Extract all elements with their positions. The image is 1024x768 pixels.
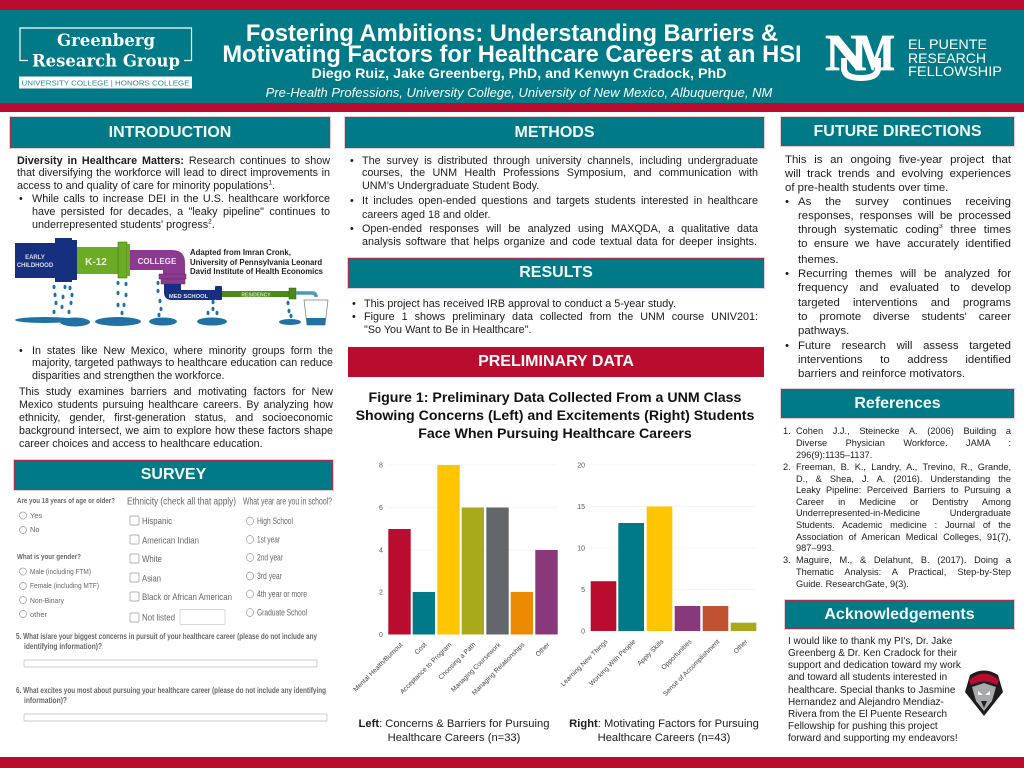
text: future directions: themes. — [798, 254, 839, 266]
survey form screenshot: Ethnicity (check all that apply) — [127, 496, 236, 508]
text: acknowledgements: Hernandez and Alejandro Mendiaz- — [788, 697, 944, 708]
text: methods: It includes open-ended questions and targets students interested in healthcare — [362, 195, 758, 207]
text: introduction top: underrepresented students' progress2. — [32, 218, 215, 231]
logo: Greenberg Research Group: Research Group — [32, 52, 180, 72]
authors: Diego Ruiz, Jake Greenberg, PhD, and Kenwyn Cradock, PhD — [312, 66, 726, 82]
text: future directions: responses, responses will be processed — [798, 210, 1011, 222]
bar chart: motivating factors: 15 — [577, 504, 585, 511]
text: future directions: interventions to address identified — [798, 354, 1011, 366]
text: methods: • — [350, 155, 354, 167]
heading: introduction: INTRODUCTION — [109, 124, 231, 141]
bar chart: concerns and barriers: Mental Health/Burnout — [352, 641, 405, 693]
caption: right chart: Right: Motivating Factors for Pursuing — [569, 718, 759, 730]
text: future directions: This is an ongoing five-year project that — [785, 154, 1011, 166]
residency pipe — [222, 291, 290, 297]
survey form screenshot: 6. What excites you most about pursuing your healthcare career (please do not include any identifying — [16, 686, 326, 695]
survey form screenshot: Not listed — [142, 612, 175, 624]
survey form screenshot: High School — [257, 516, 293, 526]
text: future directions: • — [785, 268, 789, 280]
college pipe — [130, 250, 185, 275]
survey form screenshot: Hispanic — [142, 516, 172, 527]
text: introduction bottom: This study examines barriers and motivating factors for New — [19, 386, 333, 398]
text: future directions: pathways. — [798, 325, 849, 337]
survey form screenshot: 4th year or more — [257, 589, 307, 599]
text: introduction bottom: • — [19, 345, 23, 357]
survey form screenshot: 5. What is/are your biggest concerns in pursuit of your healthcare career (please do not include any — [16, 632, 317, 641]
heading: future directions: FUTURE DIRECTIONS — [814, 123, 982, 140]
bar chart: motivating factors — [560, 462, 757, 698]
logo: UNM El Puente Research Fellowship: M — [855, 25, 895, 82]
text: references: Underrepresented-in-Medicine Undergraduate — [796, 508, 1011, 518]
text: acknowledgements: forward and supporting my endeavors! — [788, 733, 958, 744]
leaky pipeline diagram: K-12 — [85, 257, 107, 268]
red band below header — [0, 103, 1024, 112]
text: references: 296(9):1135–1137. — [796, 450, 872, 460]
logo: UNM El Puente Research Fellowship — [825, 25, 1002, 82]
figure title: Face When Pursuing Healthcare Careers — [418, 426, 692, 442]
text: references — [783, 426, 1011, 589]
bar chart: motivating factors: Apply Skills — [636, 638, 666, 668]
text: results: • — [352, 298, 356, 310]
heading: preliminary data — [348, 347, 764, 377]
survey form screenshot: Are you 18 years of age or older? — [17, 496, 115, 505]
text: references: Guide. ResearchGate, 9(3). — [796, 579, 909, 589]
bar chart: concerns and barriers: Managing Coursework — [450, 641, 503, 694]
heading: acknowledgements — [785, 600, 1014, 629]
text: methods: careers aged 18 and older. — [362, 209, 490, 221]
survey form screenshot: Black or African American — [142, 592, 232, 603]
text: pipeline credit: David Institute of Health Economics — [190, 267, 323, 276]
text: results: This project has received IRB approval to conduct a 5-year study. — [364, 298, 676, 310]
heading: introduction — [10, 117, 330, 148]
heading: results: RESULTS — [519, 264, 593, 281]
text: introduction bottom: majority, targeted pathways to healthcare education can reduce — [32, 357, 333, 369]
leaky pipeline diagram: CHILDHOOD — [17, 263, 54, 269]
text: acknowledgements: I would like to thank my PI's, Dr. Jake — [788, 636, 952, 647]
text: introduction top: that diversifying the workforce will lead to direct improvements in — [17, 167, 330, 179]
text: references: Students. Academic medicine : Journal of the — [796, 520, 1011, 530]
figure title — [356, 390, 754, 442]
survey form screenshot: Yes — [30, 511, 42, 520]
faucet pipe — [296, 293, 316, 297]
text: references: 1. — [783, 426, 791, 436]
survey form screenshot: Asian — [142, 574, 161, 584]
survey form screenshot: What is your gender? — [17, 552, 81, 561]
text: acknowledgements: and toward all students interested in — [788, 672, 947, 683]
survey form screenshot: American Indian — [142, 536, 199, 546]
leaky pipeline diagram — [15, 238, 328, 326]
survey form screenshot: Male (including FTM) — [30, 567, 91, 576]
text: acknowledgements: healthcare. Special thanks to Jasmine — [788, 685, 955, 696]
heading: methods — [345, 117, 764, 148]
text: references: Leaky Pipeline: Perceived Barriers to Pursuing a — [796, 485, 1011, 495]
bar chart: motivating factors: 0 — [581, 628, 585, 636]
text: references: D., & Shea, J. A. (2016). Understanding the — [796, 474, 1011, 484]
text: references: 3. — [783, 555, 791, 565]
text: references: Career in Medicine or Dentistry Among — [796, 497, 1011, 507]
text: pipeline credit: Adapted from Imran Cronk, — [190, 248, 291, 257]
survey form screenshot: identifying information)? — [24, 642, 102, 651]
text: future directions: to ensure we have accurately identified — [798, 238, 1011, 250]
heading: acknowledgements: Acknowledgements — [824, 606, 975, 623]
bar chart: concerns and barriers: 8 — [379, 462, 383, 470]
text: results: "So You Want to Be in Healthcare". — [364, 324, 532, 336]
survey form screenshot: Female (including MTF) — [30, 581, 99, 590]
figure title: Figure 1: Preliminary Data Collected From a UNM Class — [369, 390, 741, 406]
text: references: Cohen J.J., Steinecke A. (2006) Building a — [796, 426, 1011, 436]
text: methods: analysis software that helps organize and code textual data for deeper insights. — [362, 236, 757, 248]
bar chart: concerns and barriers: Acceptance to Program — [399, 641, 454, 696]
bar chart: motivating factors: 5 — [581, 587, 585, 594]
text: future directions: Future research will assess targeted — [798, 340, 1011, 352]
text: future directions: barriers and reinforce motivators. — [798, 368, 965, 380]
text: results — [352, 298, 758, 336]
leaky pipeline diagram: RESIDENCY — [241, 292, 271, 298]
leaky pipeline diagram: MED SCHOOL — [169, 294, 209, 300]
icon: Lobos shield — [965, 670, 1003, 716]
title — [222, 21, 802, 68]
bar chart: concerns and barriers: Choosing a Path — [437, 641, 478, 681]
survey form screenshot: information)? — [24, 696, 67, 705]
bar chart: motivating factors: Working With People — [588, 638, 638, 687]
text: introduction top: While calls to increase DEI in the U.S. healthcare workforce — [32, 193, 330, 205]
heading: references — [781, 389, 1014, 418]
bar chart: concerns and barriers: 2 — [379, 590, 383, 596]
heading: preliminary data: PRELIMINARY DATA — [478, 353, 634, 370]
text: introduction bottom: ethnicity, gender, first-generation status, and socioeconomic — [19, 412, 333, 424]
logo: Greenberg Research Group: UNIVERSITY COLLEGE | HONORS COLLEGE — [22, 78, 190, 88]
bar chart: motivating factors: 20 — [577, 462, 585, 470]
text: references: Freeman, B. K., Landry, A., Trevino, R., Grande, — [796, 462, 1011, 472]
text: future directions: Recurring themes will be analyzed for — [798, 268, 1011, 280]
text: introduction bottom: Mexico students pursuing healthcare careers. By analyzing how — [19, 399, 333, 411]
affiliation: Pre-Health Professions, University College, University of New Mexico, Albuquerque, NM — [266, 85, 772, 100]
logo: UNM El Puente Research Fellowship: RESEARCH — [908, 50, 986, 66]
figure title: Showing Concerns (Left) and Excitements (Right) Students — [356, 408, 754, 424]
survey form screenshot: No — [30, 525, 40, 534]
caption: left chart: Left: Concerns & Barriers for Pursuing — [359, 718, 549, 730]
cup — [304, 300, 328, 325]
k-12 pipe — [77, 247, 118, 274]
logo: UNM El Puente Research Fellowship: N — [825, 25, 865, 82]
text: introduction bottom: career choices and access to healthcare education. — [19, 438, 263, 450]
text: results: • — [352, 311, 356, 323]
text: references: Association of American Medical Colleges, 91(7), — [796, 532, 1011, 542]
text: methods: • — [350, 223, 354, 235]
bar chart: concerns and barriers: Other — [535, 641, 552, 658]
caption: left chart: Healthcare Careers (n=33) — [388, 732, 520, 744]
top red band — [0, 0, 1024, 10]
bar chart: concerns and barriers: Managing Relationships — [471, 641, 527, 697]
text: methods: • — [350, 195, 354, 207]
text: references: Thematic Analysis: A Practical, Step-by-Step — [796, 567, 1011, 577]
text: future directions: to promote diverse students' career — [798, 311, 1011, 323]
bar chart: concerns and barriers: 6 — [379, 505, 383, 512]
text: methods: UNM’s Undergraduate Student Body. — [362, 180, 539, 192]
text: acknowledgements: Rivera from the El Puente Research — [788, 709, 947, 720]
text: future directions: targeted interventions and programs — [798, 297, 1011, 309]
survey form screenshot: What year are you in school? — [243, 496, 332, 508]
text: acknowledgements: support and dedication toward my work — [788, 660, 961, 671]
logo: UNM El Puente Research Fellowship: FELLOWSHIP — [908, 63, 1002, 79]
text: references: 2. — [783, 462, 791, 472]
text: methods: courses, the UNM Health Professions Symposium, and communication with — [362, 167, 758, 179]
heading: results — [348, 258, 764, 288]
bar chart: concerns and barriers: Cost — [414, 641, 429, 656]
caption: left chart — [359, 718, 549, 744]
survey form screenshot — [16, 496, 332, 722]
bar chart: motivating factors: 10 — [577, 546, 585, 552]
survey form screenshot: Non-Binary — [30, 596, 64, 605]
survey form screenshot: other — [30, 610, 48, 619]
survey form screenshot: White — [142, 554, 162, 565]
text: introduction bottom: background intersect, we aim to explore how these factors shape — [19, 425, 333, 437]
leaky pipeline diagram: EARLY — [25, 255, 45, 261]
title: Motivating Factors for Healthcare Careers at an HSI — [222, 42, 802, 68]
text: introduction bottom — [19, 345, 333, 450]
text: references: Maguire, M., & Delahunt, B. (2017). Doing a — [796, 555, 1011, 565]
title: Fostering Ambitions: Understanding Barriers & — [246, 21, 778, 47]
med school pipe — [164, 284, 215, 300]
bar chart: concerns and barriers — [352, 462, 558, 697]
bar chart: concerns and barriers: 0 — [379, 632, 383, 639]
text: future directions — [785, 154, 1011, 380]
heading: methods: METHODS — [514, 124, 594, 141]
text: introduction top — [17, 155, 330, 231]
bar chart: motivating factors: Other — [733, 638, 750, 655]
text: introduction top: Diversity in Healthcare Matters: Research continues to show — [17, 155, 330, 167]
heading: survey — [14, 460, 333, 490]
bar chart: concerns and barriers: 4 — [379, 548, 383, 554]
survey form screenshot: 3rd year — [257, 571, 282, 581]
text: methods — [350, 155, 758, 248]
text: future directions: • — [785, 196, 789, 208]
survey form screenshot: 2nd year — [257, 552, 283, 562]
early childhood pipe — [15, 243, 55, 278]
text: future directions: As the survey continues receiving — [798, 196, 1011, 208]
caption: right chart: Healthcare Careers (n=43) — [598, 732, 730, 744]
text: methods: The survey is distributed through university channels, including undergraduate — [362, 155, 758, 167]
drips — [52, 281, 292, 318]
text: methods: Open-ended responses will be analyzed using MAXQDA, a qualitative data — [362, 223, 758, 235]
text: introduction bottom: In states like New Mexico, where minority groups form the — [32, 345, 333, 357]
bar chart: motivating factors: Sense of Accomplishment — [662, 638, 722, 698]
survey form screenshot: 1st year — [257, 534, 280, 544]
text: introduction bottom: disparities and strengthen the workforce. — [32, 370, 224, 382]
logo: UNM El Puente Research Fellowship: EL PUENTE — [908, 36, 987, 52]
text: results: Figure 1 shows preliminary data collected from the UNM course UNIV201: — [364, 311, 758, 323]
survey form screenshot: Graduate School — [257, 608, 307, 618]
logo: Greenberg Research Group: Greenberg — [57, 31, 155, 51]
logo: Greenberg Research Group — [19, 27, 192, 88]
text: introduction top: • — [19, 193, 23, 205]
text: references: 987–993. — [796, 543, 834, 553]
heading: survey: SURVEY — [141, 466, 206, 483]
header banner — [0, 10, 1024, 103]
text: pipeline credit: University of Pennsylvania Leonard — [190, 258, 322, 266]
bottom red band — [0, 757, 1024, 768]
heading: references: References — [854, 395, 941, 412]
text: acknowledgements: Fellowship for pushing this project — [788, 721, 938, 732]
caption: right chart — [569, 718, 759, 744]
bar chart: motivating factors: Opportunities — [660, 638, 694, 672]
text: acknowledgements — [788, 636, 961, 744]
text: pipeline credit — [190, 248, 323, 276]
text: future directions: of pre-health students over time. — [785, 182, 948, 194]
text: acknowledgements: Greenberg & Dr. Ken Cradock for their — [788, 648, 957, 659]
text: references: Diverse Physician Workforce. JAMA : — [796, 438, 1011, 448]
puddles — [15, 317, 301, 326]
heading: future directions — [781, 117, 1014, 146]
text: future directions: frequency and evaluated to develop — [798, 282, 1011, 294]
bar chart: motivating factors: Learning New Things — [560, 638, 610, 688]
leaky pipeline diagram: COLLEGE — [138, 257, 177, 266]
text: future directions: • — [785, 340, 789, 352]
text: introduction top: access to and quality of care for minority populations1. — [17, 179, 275, 192]
text: future directions: will track trends and evolving experiences — [785, 168, 1011, 180]
